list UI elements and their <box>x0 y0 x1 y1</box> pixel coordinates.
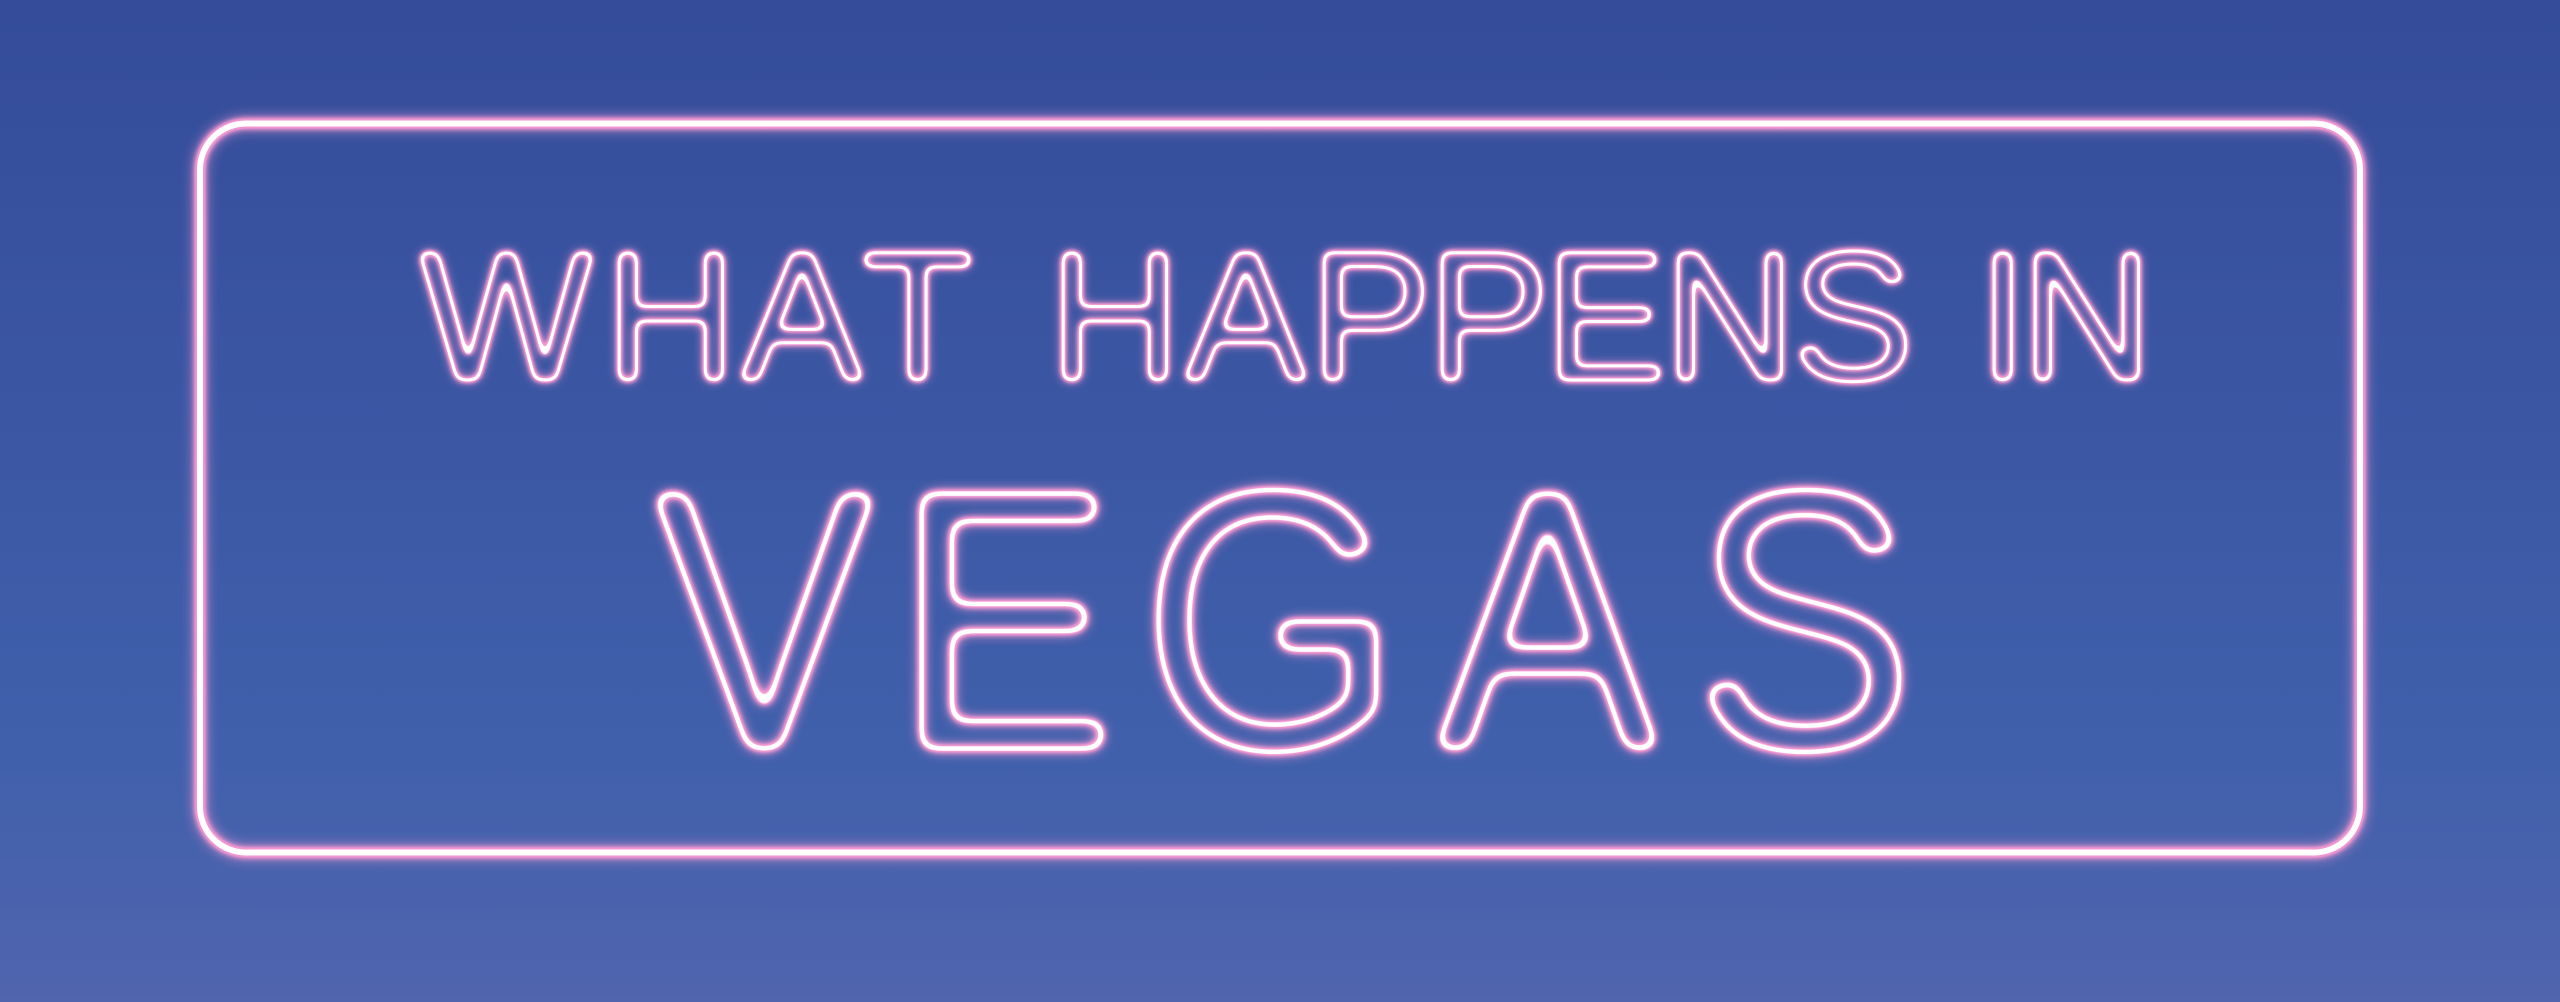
heading: vegas: VEGAS <box>653 413 1915 828</box>
heading: what happens in: WHAT HAPPENS IN <box>419 214 2154 420</box>
neon frame <box>200 124 2360 852</box>
